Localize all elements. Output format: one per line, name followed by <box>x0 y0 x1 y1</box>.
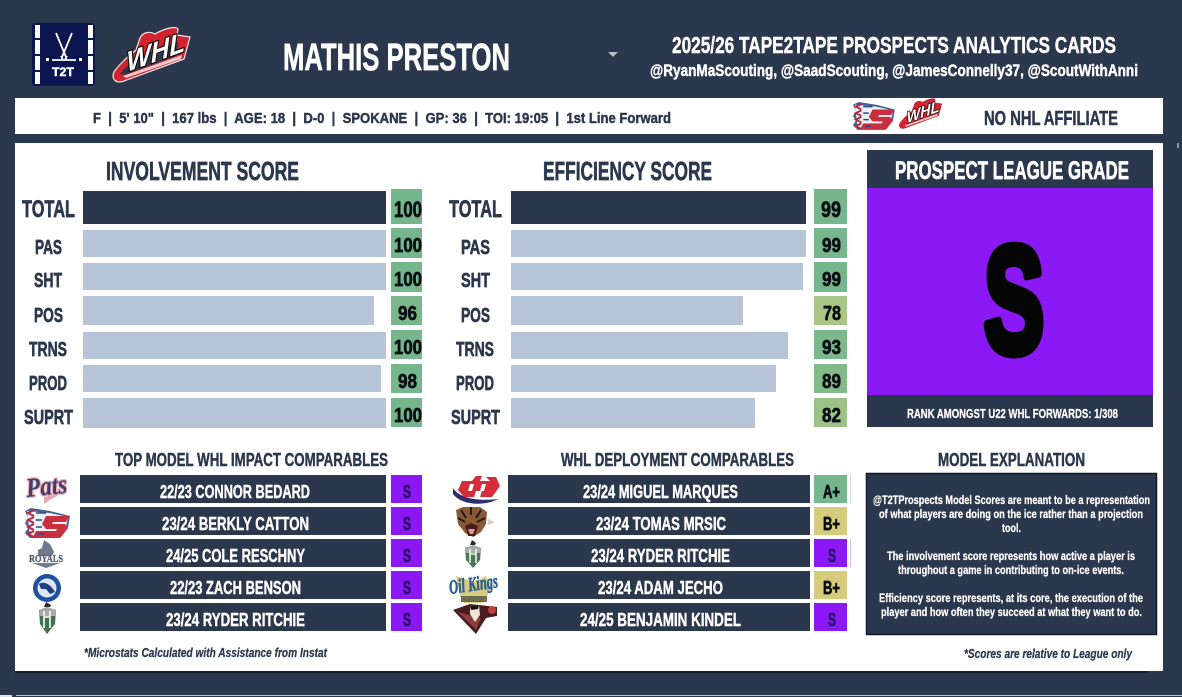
row: Adam Jecho: 23/24 ADAM JECHO <box>598 577 723 598</box>
row: POS: POS <box>34 305 63 327</box>
row: PROD: 98 <box>398 371 417 393</box>
panel: deployment comparables <box>448 449 851 634</box>
row: SHT <box>461 262 847 292</box>
heading: deployment comparables: WHL DEPLOYMENT COMPARABLES <box>561 449 794 470</box>
row: PROD <box>456 364 847 395</box>
row: SHT: SHT <box>461 270 490 292</box>
panel: prospect league grade <box>867 150 1153 427</box>
row: Ryder Ritchie <box>508 539 851 567</box>
row: TRNS: 100 <box>394 337 422 359</box>
row: total: TOTAL <box>449 196 502 223</box>
title: player name: MATHIS PRESTON <box>283 37 510 79</box>
row: Tomas Mrsic: 23/24 TOMAS MRSIC <box>596 513 726 534</box>
row: Zach Benson: S <box>403 578 411 598</box>
icon: Spokane logo small <box>853 102 895 130</box>
row: total: 100 <box>394 197 422 222</box>
icon: Regina Pats: Pats <box>24 469 68 503</box>
row: POS <box>34 296 422 327</box>
row: Cole Reschny <box>80 539 422 567</box>
row: SUPRT <box>24 398 422 429</box>
text: NHL affiliate: NO NHL AFFILIATE <box>984 108 1118 130</box>
row: Adam Jecho: B+ <box>823 578 840 598</box>
text: grade letter: S <box>984 215 1044 384</box>
text: model explanation body: throughout a game in contributing to on-ice events. <box>898 565 1124 577</box>
row: TRNS: 93 <box>822 337 841 359</box>
row: SUPRT: 82 <box>822 405 841 427</box>
row: PROD: PROD <box>456 373 494 395</box>
row: total <box>22 189 422 224</box>
text: scores footnote: *Scores are relative to League only <box>964 646 1133 661</box>
row: Berkly Catton <box>80 507 422 535</box>
row: TRNS: TRNS <box>29 339 67 361</box>
row: Berkly Catton: 23/24 BERKLY CATTON <box>162 513 309 534</box>
row: Miguel Marques <box>508 475 851 503</box>
row: POS: POS <box>461 305 490 327</box>
row: Ryder Ritchie <box>80 603 422 631</box>
row: Miguel Marques: A+ <box>823 482 840 502</box>
icon: Edmonton Oil Kings: Oil Kings <box>448 570 499 599</box>
panel: main card <box>15 143 1163 673</box>
text: microstats footnote: *Microstats Calculated with Assistance from Instat <box>84 645 328 660</box>
row: Tomas Mrsic: B+ <box>823 514 840 534</box>
icon: WHL logo: WHL <box>126 25 185 78</box>
row: Connor Bedard <box>80 475 422 503</box>
row: SUPRT <box>451 398 847 429</box>
row: TRNS: TRNS <box>456 339 494 361</box>
row: POS: 78 <box>823 303 841 325</box>
row: total <box>449 189 847 224</box>
row: SUPRT: 100 <box>394 405 422 427</box>
heading: involvement score: INVOLVEMENT SCORE <box>106 156 299 186</box>
row: SHT: 100 <box>394 269 422 291</box>
row: SUPRT: SUPRT <box>451 407 500 429</box>
row: total: TOTAL <box>22 196 75 223</box>
text: model explanation body: tool. <box>1002 523 1021 535</box>
row: PAS <box>461 228 847 259</box>
row: POS: 96 <box>398 303 417 325</box>
chart: efficiency score <box>449 156 847 429</box>
row: Benjamin Kindel: 24/25 BENJAMIN KINDEL <box>580 609 741 630</box>
row: POS <box>461 296 847 327</box>
icon: dropdown arrow <box>608 52 618 57</box>
text: player details: F | 5' 10" | 167 lbs | AGE: 18 | D-0 | SPOKANE | GP: 36 | TOI: 19:05 | 1st Line Forward <box>93 110 671 127</box>
row: Zach Benson: 22/23 ZACH BENSON <box>170 577 301 598</box>
icon: Prince George Cougars crest <box>465 540 481 568</box>
icon: Winnipeg Ice <box>33 574 61 602</box>
icon: WHL logo small: WHL <box>906 98 940 127</box>
icon: Spokane Chiefs <box>25 508 70 538</box>
icon: Victoria Royals <box>29 540 63 568</box>
row: PAS: 99 <box>822 235 841 257</box>
row: Tomas Mrsic <box>508 507 847 535</box>
row: Benjamin Kindel <box>508 603 847 631</box>
text: model explanation body <box>873 495 1150 619</box>
row: total: 99 <box>821 197 841 222</box>
chart: involvement score <box>22 156 422 429</box>
row: Ryder Ritchie: 23/24 RYDER RITCHIE <box>166 609 305 630</box>
heading: impact comparables: TOP MODEL WHL IMPACT COMPARABLES <box>115 449 388 470</box>
icon: Medicine Hat Tigers <box>456 507 495 537</box>
row: Ryder Ritchie: 23/24 RYDER RITCHIE <box>591 545 730 566</box>
icon: Calgary Hitmen <box>453 604 497 634</box>
icon: Victoria Royals: ROYALS <box>29 554 63 565</box>
icon: Edmonton Oil Kings <box>448 570 499 603</box>
row: PROD <box>29 364 422 395</box>
row: Connor Bedard: S <box>403 482 411 502</box>
row: Ryder Ritchie: S <box>403 610 411 630</box>
row: Ryder Ritchie: S <box>828 546 836 566</box>
icon: T2T logo <box>32 23 95 86</box>
row: PAS: PAS <box>35 237 62 259</box>
row: PAS: PAS <box>461 237 490 259</box>
row: Miguel Marques: 23/24 MIGUEL MARQUES <box>583 481 738 502</box>
icon: Lethbridge Hurricanes <box>453 476 500 504</box>
row: TRNS <box>456 330 847 361</box>
panel: top model comparables <box>24 449 422 634</box>
row: Berkly Catton: S <box>403 514 411 534</box>
icon: T2T logo: T2T <box>52 65 75 79</box>
icon: Prince George Cougars crest <box>39 602 56 634</box>
panel: player info bar <box>15 98 1163 134</box>
row: SHT <box>34 262 422 292</box>
row: PROD: 89 <box>822 371 841 393</box>
heading: efficiency score: EFFICIENCY SCORE <box>543 156 712 186</box>
row: SHT: SHT <box>34 270 62 292</box>
row: SHT: 99 <box>822 269 841 291</box>
row: Zach Benson <box>80 571 422 599</box>
row: SUPRT: SUPRT <box>24 407 73 429</box>
row: Cole Reschny: 24/25 COLE RESCHNY <box>166 545 305 566</box>
row: TRNS <box>29 330 422 361</box>
panel: model explanation <box>866 449 1156 634</box>
row: Cole Reschny: S <box>403 546 411 566</box>
row: PROD: PROD <box>29 373 67 395</box>
row: PAS <box>35 228 422 259</box>
row: PAS: 100 <box>394 235 422 257</box>
row: Benjamin Kindel: S <box>828 610 836 630</box>
row: Adam Jecho <box>508 571 847 599</box>
heading: model explanation: MODEL EXPLANATION <box>938 449 1085 470</box>
row: Connor Bedard: 22/23 CONNOR BEDARD <box>160 481 310 502</box>
